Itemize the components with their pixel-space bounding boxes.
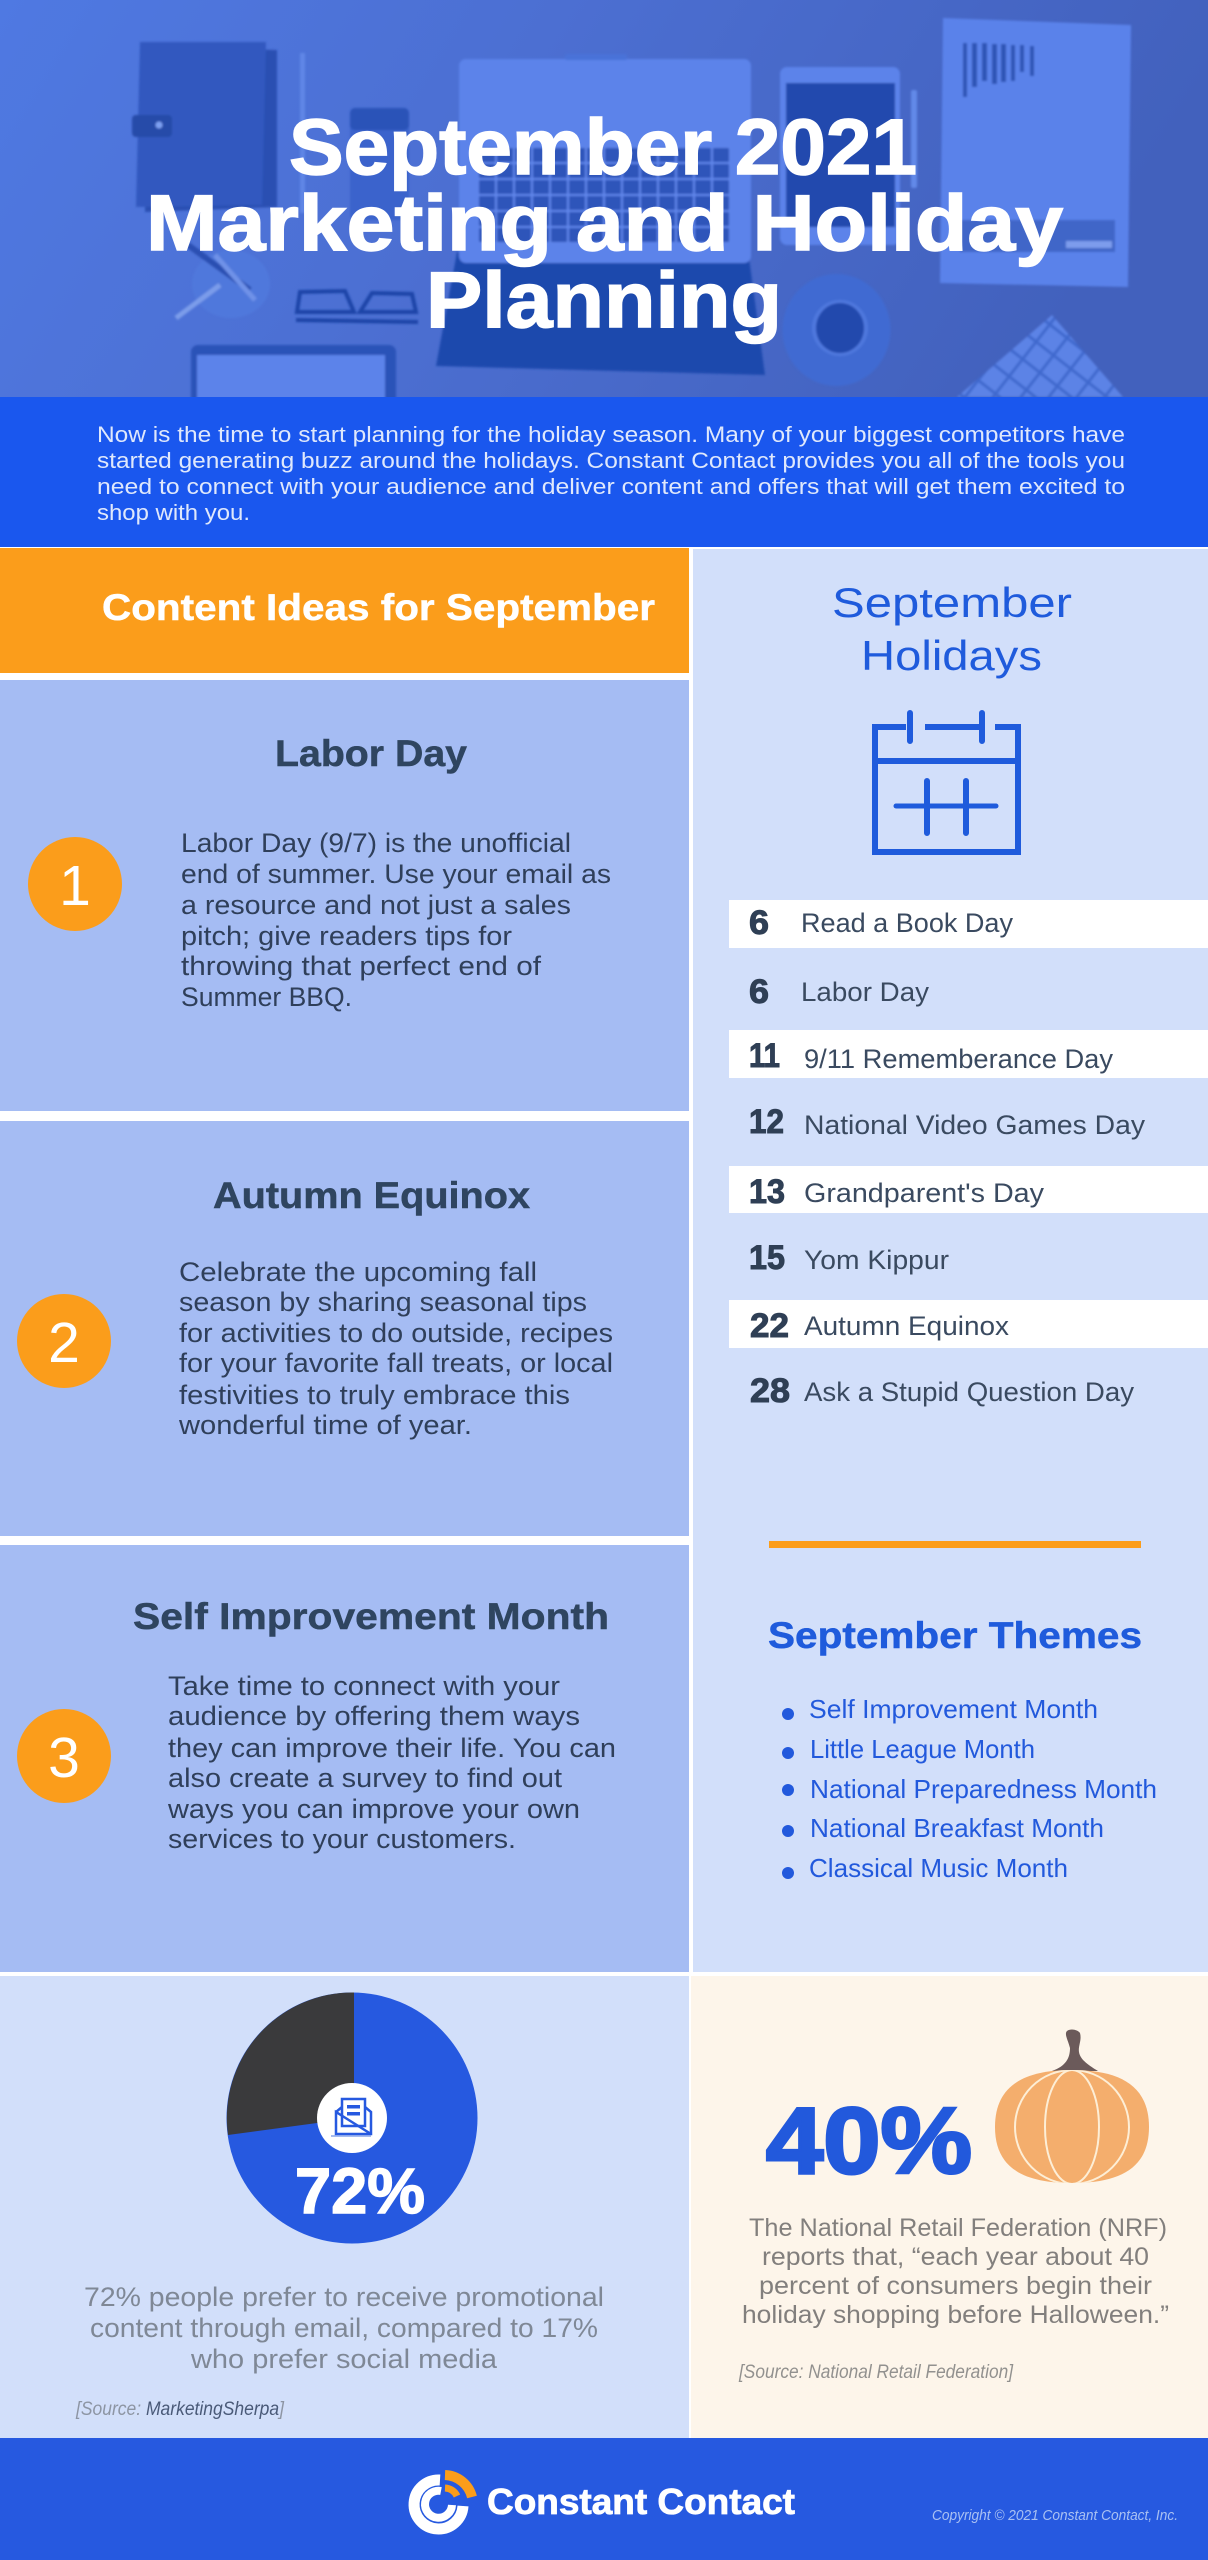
- icon: laptop: [459, 54, 751, 263]
- row: 22 autumn equinox: Autumn Equinox: [804, 1311, 1010, 1341]
- heading: content ideas: Content Ideas for September: [102, 587, 655, 628]
- row: 6 labor day: 6: [749, 973, 769, 1011]
- text block: autumn equinox body: Celebrate the upcoming fall: [179, 1257, 537, 1287]
- title: September 2021: [289, 102, 917, 191]
- list: themes: National Preparedness Month: [810, 1774, 1157, 1804]
- panel: email statistic: [0, 1976, 689, 2438]
- panel: hero photo header: [0, 0, 1208, 405]
- logo wordmark: Constant Contact: [487, 2481, 795, 2522]
- text block: intro paragraph: need to connect with your audience and deliver content and offers that will get them excited to: [97, 474, 1125, 499]
- panel: footer: [0, 2438, 1208, 2560]
- icon: lower tablet: [190, 344, 397, 397]
- row: 15 yom kippur: [749, 1239, 949, 1277]
- icon: number 1 badge: [28, 837, 122, 931]
- row: 22 autumn equinox: 22: [750, 1307, 789, 1345]
- text block: labor day body: throwing that perfect end of: [181, 951, 542, 981]
- row: 6 labor day: [749, 973, 930, 1011]
- heading: september themes: September Themes: [768, 1615, 1142, 1656]
- icon: smartphone: [350, 108, 409, 220]
- icon: number 3 badge: [17, 1709, 111, 1803]
- text block: autumn equinox body: festivities to truly embrace this: [179, 1380, 570, 1410]
- icon: coffee cup and saucer: [782, 274, 890, 386]
- text block: self improvement body: audience by offering them ways: [168, 1701, 580, 1731]
- icon: tablet: [780, 67, 917, 245]
- text block: labor day body: a resource and not just a sales: [181, 890, 571, 920]
- heading: self improvement month: Self Improvement Month: [133, 1596, 609, 1637]
- chart: pie 72 percent: [226, 1992, 478, 2244]
- row: 15 yom kippur: Yom Kippur: [804, 1245, 949, 1275]
- icon: number 2 badge: 2: [48, 1311, 80, 1375]
- panel: intro band: [0, 397, 1208, 547]
- text block: self improvement body: also create a survey to find out: [168, 1763, 563, 1793]
- panel: content ideas header: [0, 548, 689, 673]
- icon: constant contact logo: [414, 2475, 472, 2529]
- icon: number 3 badge: 3: [48, 1726, 80, 1790]
- text block: NRF quote: percent of consumers begin their: [759, 2272, 1152, 2300]
- text block: labor day body: end of summer. Use your email as: [181, 859, 611, 889]
- panel: holiday shopping statistic: [691, 1976, 1208, 2438]
- row: 13 grandparents day: 13: [749, 1173, 785, 1211]
- icon: open envelope: [317, 2083, 387, 2153]
- icon: dark notebook under laptop: [436, 252, 765, 375]
- text block: NRF quote: holiday shopping before Halloween.”: [742, 2301, 1169, 2329]
- panel: idea 2 autumn equinox: [0, 1121, 689, 1536]
- row: 6 read a book day: [729, 900, 1208, 948]
- row: 12 video games day: 12: [749, 1103, 784, 1141]
- row: 22 autumn equinox: [729, 1300, 1208, 1348]
- title: [146, 102, 1063, 344]
- row: 28 ask a stupid question day: 28: [750, 1372, 790, 1410]
- text block: self improvement body: [167, 1671, 616, 1854]
- list: themes: National Breakfast Month: [810, 1813, 1104, 1843]
- text block: self improvement body: services to your customers.: [168, 1824, 516, 1854]
- text block: intro paragraph: shop with you.: [97, 500, 250, 525]
- text block: labor day body: [181, 828, 611, 1012]
- row: 11 remembrance day: 11: [749, 1037, 780, 1075]
- row: 6 labor day: Labor Day: [801, 977, 930, 1007]
- text block: autumn equinox body: [178, 1257, 613, 1440]
- text block: email statistic caption: who prefer social media: [190, 2344, 498, 2374]
- text block: intro paragraph: Now is the time to start planning for the holiday season. Many of your biggest competitors have: [97, 422, 1125, 447]
- heading: autumn equinox: Autumn Equinox: [213, 1175, 530, 1216]
- text block: labor day body: Labor Day (9/7) is the unofficial: [181, 828, 571, 858]
- list: themes: Little League Month: [810, 1734, 1035, 1764]
- list: themes: Classical Music Month: [809, 1853, 1068, 1883]
- title: Planning: [426, 255, 782, 344]
- list: holiday rows: [729, 900, 1208, 1410]
- text block: intro paragraph: [97, 422, 1125, 525]
- icon: number 1 badge: 1: [59, 854, 91, 918]
- row: 28 ask a stupid question day: Ask a Stupid Question Day: [804, 1377, 1135, 1407]
- text block: NRF quote: The National Retail Federation (NRF): [749, 2214, 1167, 2242]
- list: themes: Self Improvement Month: [809, 1694, 1098, 1724]
- text block: labor day body: Summer BBQ.: [181, 982, 352, 1012]
- row: 12 video games day: National Video Games Day: [804, 1110, 1146, 1140]
- row: 15 yom kippur: 15: [749, 1239, 785, 1277]
- row: 11 remembrance day: 9/11 Rememberance Day: [804, 1044, 1113, 1074]
- icon: calendar: [875, 713, 1018, 852]
- row: 6 read a book day: 6: [749, 904, 769, 942]
- icon: report sheet: [940, 18, 1131, 287]
- text block: NRF quote: reports that, “each year about 40: [762, 2243, 1149, 2271]
- heading: september holidays: Holidays: [861, 632, 1042, 679]
- label: 72 percent: 72%: [295, 2155, 425, 2227]
- row: 11 remembrance day: [729, 1030, 1208, 1078]
- row: 13 grandparents day: [729, 1166, 1208, 1213]
- stat: 40 percent: 40%: [766, 2088, 972, 2193]
- panel: idea 3 self improvement month: [0, 1545, 689, 1972]
- text block: email statistic caption: 72% people prefer to receive promotional: [84, 2282, 604, 2312]
- row: 13 grandparents day: Grandparent's Day: [804, 1178, 1045, 1208]
- text block: self improvement body: Take time to connect with your: [168, 1671, 560, 1701]
- row: 12 video games day: [749, 1103, 1146, 1141]
- icon: number 2 badge: [17, 1294, 111, 1388]
- text block: email statistic caption: content through email, compared to 17%: [90, 2313, 598, 2343]
- icon: pumpkin: [995, 2030, 1149, 2184]
- text block: labor day body: pitch; give readers tips for: [181, 921, 512, 951]
- heading: labor day: Labor Day: [275, 733, 467, 774]
- row: 28 ask a stupid question day: [750, 1372, 1135, 1410]
- panel: september holidays and themes: [693, 549, 1208, 1972]
- row: 6 read a book day: Read a Book Day: [801, 908, 1013, 938]
- icon: planner with strap: [132, 42, 305, 213]
- list: themes: [782, 1694, 1157, 1883]
- text block: autumn equinox body: wonderful time of year.: [178, 1410, 472, 1440]
- icon: pen cup: [176, 245, 270, 318]
- text block: autumn equinox body: for your favorite fall treats, or local: [179, 1348, 613, 1378]
- text block: self improvement body: ways you can improve your own: [167, 1794, 580, 1824]
- source: marketing sherpa: [Source: MarketingSherpa]: [75, 2399, 285, 2420]
- copyright: Copyright © 2021 Constant Contact, Inc.: [932, 2507, 1178, 2524]
- heading: september holidays: September: [832, 579, 1072, 626]
- text block: email statistic caption: [84, 2282, 604, 2374]
- title: Marketing and Holiday: [146, 178, 1063, 267]
- text block: autumn equinox body: season by sharing seasonal tips: [179, 1287, 587, 1317]
- text block: autumn equinox body: for activities to do outside, recipes: [179, 1318, 613, 1348]
- text block: NRF quote: [742, 2214, 1169, 2329]
- source: national retail federation: [Source: National Retail Federation]: [738, 2362, 1014, 2383]
- text block: intro paragraph: started generating buzz around the holidays. Constant Contact provides you all of the tools you: [97, 448, 1125, 473]
- panel: idea 1 labor day: [0, 680, 689, 1111]
- icon: glasses: [296, 291, 418, 322]
- heading: september holidays: [832, 579, 1072, 679]
- text block: self improvement body: they can improve their life. You can: [168, 1733, 616, 1763]
- icon: keyboard corner: [957, 315, 1123, 397]
